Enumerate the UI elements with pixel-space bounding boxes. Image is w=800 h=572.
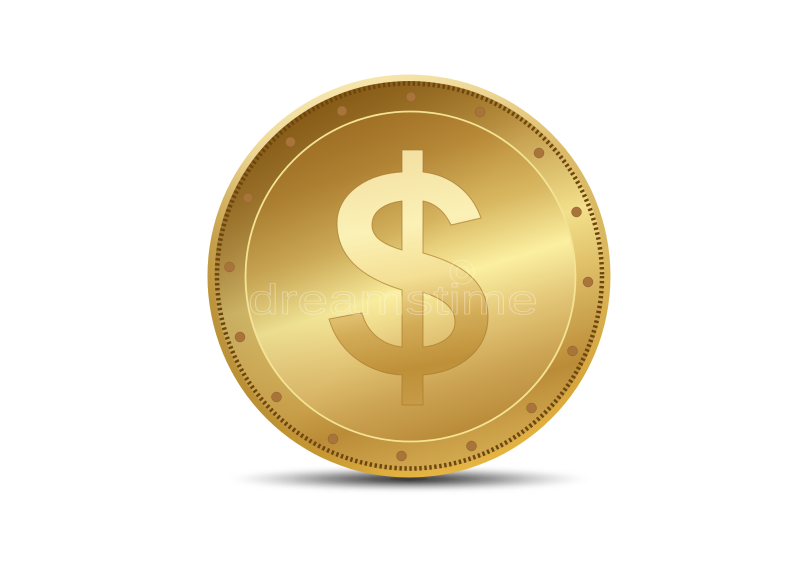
outer rim (208, 74, 610, 478)
ground shadow (229, 467, 589, 491)
inner band (214, 81, 604, 471)
studs around band (224, 92, 593, 461)
watermark (248, 260, 538, 323)
milled edge dentils (217, 84, 602, 468)
dollar sign (329, 150, 488, 405)
watermark: dreamstime (248, 276, 538, 323)
coin (208, 74, 610, 478)
face shading (246, 112, 574, 440)
engraved ring and face (246, 112, 576, 442)
